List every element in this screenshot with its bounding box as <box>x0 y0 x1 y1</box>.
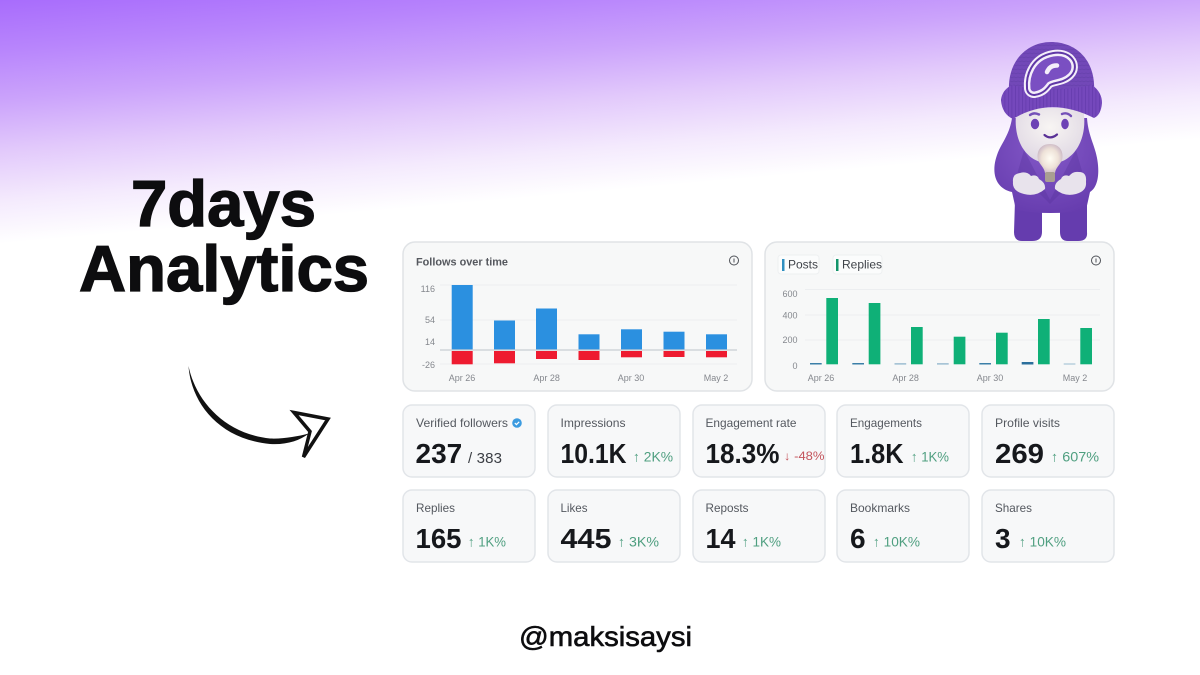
x axis labels: Apr 28 <box>892 373 919 383</box>
title <box>79 167 369 305</box>
y axis labels: 200 <box>782 335 798 345</box>
legend: replies: Replies <box>842 258 882 272</box>
negative bars <box>452 351 727 364</box>
replies bars <box>826 298 1092 364</box>
icon: verified badge <box>512 418 522 428</box>
card: shares: Shares <box>995 501 1032 515</box>
mascot robe shadow <box>1016 150 1084 204</box>
card: bookmarks: 6 <box>850 523 866 554</box>
posts bars <box>810 362 1075 364</box>
card: profile visits: 269 <box>995 438 1044 469</box>
mascot logo <box>1034 60 1068 88</box>
card: shares: ↑ 10K% <box>1019 534 1066 550</box>
card: replies: ↑ 1K% <box>468 534 506 550</box>
x axis labels: Apr 30 <box>618 373 644 383</box>
mascot body <box>994 118 1098 213</box>
mascot light bulb <box>1038 144 1062 182</box>
title: 7days <box>131 167 316 240</box>
x axis labels: Apr 26 <box>808 373 834 383</box>
card: replies: Replies <box>416 501 455 515</box>
x axis labels <box>808 373 1087 383</box>
card: engagement rate: Engagement rate <box>706 416 797 430</box>
y axis labels: 400 <box>782 310 798 320</box>
legend: posts <box>778 255 819 274</box>
card: reposts <box>693 490 825 562</box>
arrow <box>188 366 328 457</box>
x axis labels: May 2 <box>704 373 728 383</box>
x axis labels: May 2 <box>1063 373 1087 383</box>
x axis labels: Apr 30 <box>977 373 1003 383</box>
y axis labels: 54 <box>425 315 435 325</box>
card: verified followers: 237 <box>416 438 462 469</box>
legend: replies <box>833 255 882 274</box>
y axis labels: -26 <box>422 360 435 370</box>
info icon <box>1092 256 1100 265</box>
card: likes: 445 <box>560 523 612 554</box>
chart heading: Follows over time <box>416 256 508 268</box>
card: profile visits: Profile visits <box>995 416 1060 430</box>
footer handle: @maksisaysi <box>519 621 692 652</box>
card: verified followers <box>403 405 535 477</box>
y axis labels: 0 <box>792 361 798 371</box>
mascot <box>994 42 1102 241</box>
card: engagements: 1.8K <box>850 438 904 469</box>
y axis labels: 14 <box>425 337 435 347</box>
card: bookmarks: Bookmarks <box>850 501 910 515</box>
title: Analytics <box>79 232 369 305</box>
x axis labels: Apr 28 <box>533 373 560 383</box>
card: engagements <box>837 405 969 477</box>
card: likes: ↑ 3K% <box>618 534 659 550</box>
card: engagement rate <box>693 405 825 477</box>
mascot face <box>1016 108 1084 163</box>
mascot hands <box>1013 172 1086 195</box>
card: likes: Likes <box>560 501 588 515</box>
mascot legs <box>1014 200 1087 241</box>
card: impressions: ↑ 2K% <box>633 448 673 464</box>
card: replies: 165 <box>416 523 462 554</box>
card: profile visits <box>982 405 1114 477</box>
y axis labels <box>782 289 798 371</box>
info icon <box>730 256 738 265</box>
card: bookmarks: ↑ 10K% <box>873 534 920 550</box>
card: shares <box>982 490 1114 562</box>
x axis labels <box>449 373 728 383</box>
positive bars <box>452 285 727 350</box>
card: bookmarks <box>837 490 969 562</box>
mascot eyes and smile <box>1030 113 1071 137</box>
mascot hat <box>1009 42 1094 92</box>
card: engagements: ↑ 1K% <box>911 448 949 464</box>
card: engagements: Engagements <box>850 416 922 430</box>
card: shares: 3 <box>995 523 1011 554</box>
card: impressions: 10.1K <box>560 438 626 469</box>
y axis labels <box>421 284 435 370</box>
card: reposts: Reposts <box>706 501 748 515</box>
card: profile visits: ↑ 607% <box>1051 448 1099 464</box>
legend: posts: Posts <box>788 258 818 272</box>
card: engagement rate: 18.3% <box>706 438 780 469</box>
card: verified followers: / 383 <box>468 450 502 467</box>
card: impressions <box>548 405 680 477</box>
panel: follows over time <box>403 242 752 391</box>
card: verified followers: Verified followers <box>416 416 508 430</box>
x axis labels: Apr 26 <box>449 373 475 383</box>
panel: posts and replies <box>765 242 1114 391</box>
card: replies <box>403 490 535 562</box>
card: reposts: ↑ 1K% <box>742 534 781 550</box>
y axis labels: 600 <box>782 289 798 299</box>
mascot hat cuff <box>1001 85 1102 119</box>
card: engagement rate: ↓ -48% <box>784 449 825 463</box>
card: impressions: Impressions <box>560 416 626 430</box>
y axis labels: 116 <box>421 284 435 294</box>
card: likes <box>548 490 680 562</box>
card: reposts: 14 <box>706 523 736 554</box>
